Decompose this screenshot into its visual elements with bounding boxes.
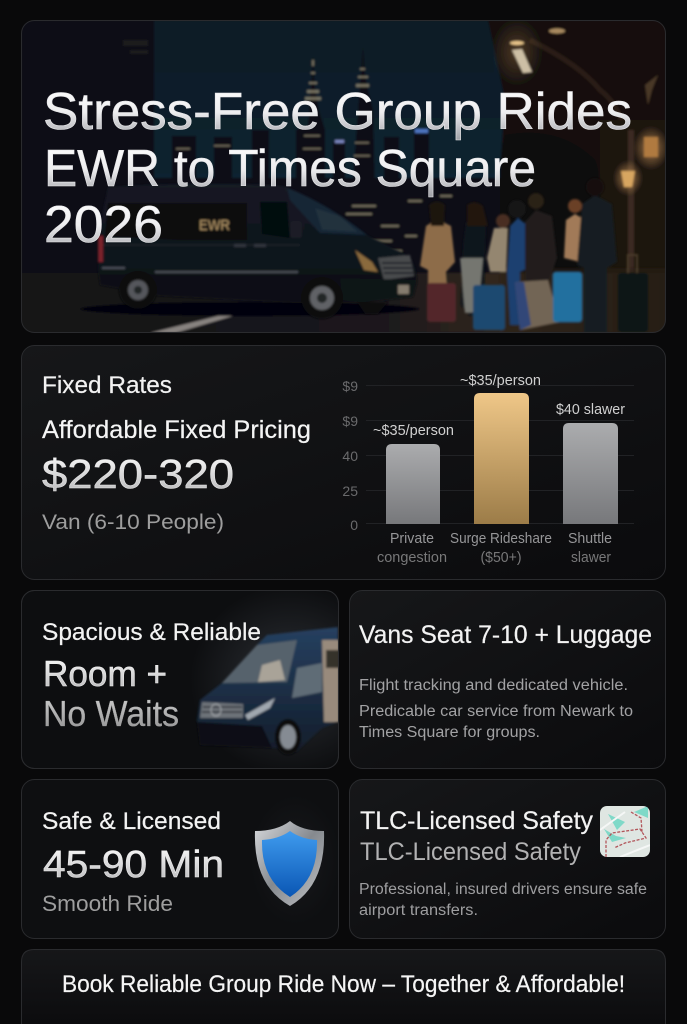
- panel: safe and licensed: [22, 780, 340, 938]
- title: Stress-Free Group Rides: [43, 83, 632, 141]
- bar value labels: ~$35/person: [373, 423, 454, 439]
- subheading: TLC-Licensed Safety: [360, 838, 581, 866]
- price: $220-320: [42, 451, 234, 497]
- hero night scene: [21, 18, 669, 333]
- panel: TLC licensed safety: [350, 780, 666, 938]
- station canopy: [488, 21, 665, 180]
- bar: shuttle: [563, 423, 618, 524]
- bar: private: [386, 444, 440, 524]
- bar chart: [342, 373, 634, 566]
- x axis labels: ($50+): [480, 550, 522, 566]
- body text: Times Square for groups.: [359, 724, 540, 741]
- panel: call to action: [22, 950, 666, 1024]
- heading: affordable fixed pricing: Affordable Fixed Pricing: [42, 416, 311, 444]
- x axis labels: Private: [390, 531, 434, 547]
- y axis labels: [342, 378, 358, 533]
- y axis labels: $9: [342, 413, 358, 429]
- panel: vans seat: [350, 590, 666, 768]
- heading: Vans Seat 7-10 + Luggage: [359, 621, 652, 649]
- group of passengers with luggage: [420, 178, 666, 333]
- icon: blue van with open door: [196, 606, 338, 754]
- van: EWR: [98, 184, 417, 319]
- x axis labels: [377, 531, 612, 566]
- title: [43, 83, 632, 254]
- title: 2026: [44, 196, 163, 254]
- body text: Predicable car service from Newark to: [359, 703, 633, 720]
- wheel: front: [301, 277, 343, 319]
- body text: [359, 881, 647, 919]
- y axis labels: 25: [342, 483, 358, 499]
- x axis labels: Shuttle: [568, 531, 612, 547]
- wheel: rear: [119, 271, 157, 309]
- panel: hero: [21, 18, 669, 333]
- icon: shield: [255, 821, 324, 906]
- body text: airport transfers.: [359, 902, 478, 919]
- bar value labels: [373, 373, 625, 439]
- bar: surge rideshare: [474, 393, 529, 524]
- y axis labels: $9: [342, 378, 358, 394]
- heading: Spacious & Reliable: [42, 619, 261, 646]
- stat: room: Room +: [43, 653, 167, 694]
- body text: Flight tracking and dedicated vehicle.: [359, 677, 628, 694]
- caption: Smooth Ride: [42, 891, 173, 916]
- bar value labels: $40 slawer: [556, 402, 625, 418]
- bar value labels: ~$35/person: [460, 373, 541, 389]
- x axis labels: slawer: [571, 550, 611, 566]
- icon: route map: [600, 806, 650, 857]
- x axis labels: Surge Rideshare: [450, 531, 552, 547]
- body text: [359, 677, 633, 741]
- call to action text: Book Reliable Group Ride Now – Together & Affordable!: [62, 971, 625, 998]
- panel: fixed rates: [22, 346, 666, 580]
- stat: 45-90 Min: [43, 844, 224, 886]
- heading: TLC-Licensed Safety: [360, 807, 593, 835]
- body text: Professional, insured drivers ensure safe: [359, 881, 647, 898]
- title: EWR to Times Square: [44, 140, 536, 198]
- price caption: Van (6-10 People): [42, 510, 224, 534]
- y axis labels: 0: [350, 517, 358, 533]
- panel: spacious and reliable: [21, 590, 339, 769]
- x axis labels: congestion: [377, 550, 447, 566]
- van: EWR: EWR: [199, 217, 230, 234]
- heading: Safe & Licensed: [42, 808, 221, 835]
- stat: no waits: No Waits: [43, 693, 179, 734]
- heading: fixed rates: Fixed Rates: [42, 372, 172, 399]
- y axis labels: 40: [342, 448, 358, 464]
